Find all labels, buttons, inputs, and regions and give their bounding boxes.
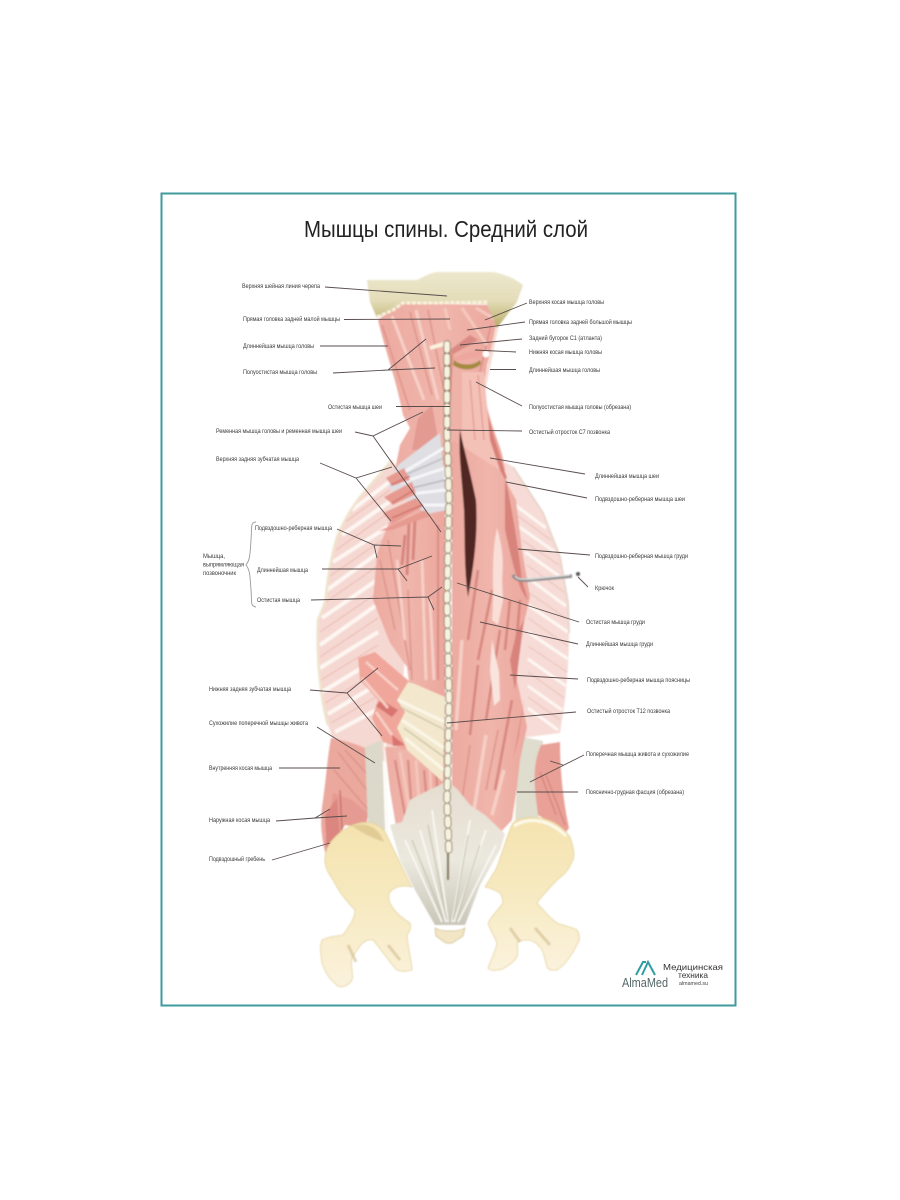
right labels: Длиннейшая мышца груди xyxy=(586,641,653,648)
right labels: Прямая головка задней большой мышцы xyxy=(529,319,632,326)
right labels: Остистая мышца груди xyxy=(586,620,645,626)
left abdominal wall: oblique muscles xyxy=(321,738,387,860)
left labels: Ременная мышца головы и ременная мышца шеи xyxy=(216,429,342,435)
right labels xyxy=(529,300,690,796)
neck muscles xyxy=(378,303,507,482)
left labels: Прямая головка задней малой мышцы xyxy=(243,316,340,323)
ribs left xyxy=(318,460,420,765)
logo: AlmaMed: техника xyxy=(678,970,708,980)
logo: AlmaMed xyxy=(622,962,723,990)
upper gray aponeurosis with serratus slips xyxy=(379,433,447,531)
left labels xyxy=(203,283,382,863)
central lumbosacral fascia xyxy=(390,780,505,925)
right labels: Остистый отросток Т12 позвонка xyxy=(587,708,671,715)
left labels: выпрямляющая xyxy=(203,562,244,568)
right labels: Длиннейшая мышца шеи xyxy=(595,473,659,480)
left erector spinae xyxy=(373,480,445,830)
right labels: Нижняя косая мышца головы xyxy=(529,350,602,356)
right labels: Подвздошно-реберная мышца шеи xyxy=(595,497,685,503)
retractor hook xyxy=(513,572,580,580)
right labels: Верхняя косая мышца головы xyxy=(529,300,604,306)
ribs right xyxy=(500,462,569,740)
left labels: Остистая мышца xyxy=(257,598,301,604)
left labels: Верхняя задняя зубчатая мышца xyxy=(216,457,300,463)
logo: AlmaMed: almamed.su xyxy=(679,981,708,987)
leader lines xyxy=(246,287,590,860)
right labels: Полуостистая мышца головы (обрезана) xyxy=(529,405,631,411)
logo mark xyxy=(636,962,655,975)
left lower serratus posterior xyxy=(358,652,445,782)
iliac bone left xyxy=(320,822,412,987)
right erector spinae xyxy=(452,440,530,835)
spine of spinous processes xyxy=(447,342,449,880)
left labels: Мышца, xyxy=(203,554,225,560)
left labels: Нижняя задняя зубчатая мышца xyxy=(209,687,292,693)
obliquus inferior bar xyxy=(452,348,484,362)
right labels: Остистый отросток С7 позвонка xyxy=(529,429,611,436)
poster frame xyxy=(162,194,736,1006)
left labels: Сухожилие поперечной мышцы живота xyxy=(209,720,309,727)
C1 arch xyxy=(453,360,481,369)
anatomical illustration xyxy=(318,272,580,987)
skull base xyxy=(367,272,523,328)
right labels: Длиннейшая мышца головы xyxy=(529,367,600,374)
iliac bone right xyxy=(485,818,579,970)
left labels: Длиннейшая мышца головы xyxy=(243,343,314,350)
title: Мышцы спины. Средний слой xyxy=(304,216,588,242)
left labels: Подвздошно-реберная мышца xyxy=(255,526,333,532)
left labels: Верхняя шейная линия черепа xyxy=(242,283,321,290)
left labels: Длиннейшая мышца xyxy=(257,567,309,574)
right labels: Задний бугорок С1 (атланта) xyxy=(529,335,602,342)
dark paraspinal cleft xyxy=(459,430,477,597)
right labels: Подвздошно-реберная мышца поясницы xyxy=(587,678,690,684)
bracket xyxy=(246,522,256,607)
left labels: Полуостистая мышца головы xyxy=(243,370,317,376)
logo tagline: Медицинская xyxy=(663,962,723,972)
tendon near C2 xyxy=(430,343,447,348)
left labels: Остистая мышца шеи xyxy=(328,405,382,411)
right labels: Подвздошно-реберная мышца груди xyxy=(595,554,688,560)
right labels: Пояснично-грудная фасция (обрезана) xyxy=(586,790,684,796)
logo wordmark: AlmaMed xyxy=(622,976,668,990)
right labels: Поперечная мышца живота и сухожилие xyxy=(586,752,690,758)
left labels: позвоночник xyxy=(203,571,236,577)
left labels: Наружная косая мышца xyxy=(209,818,271,824)
right abdominal wall: transversus and fascia xyxy=(514,737,569,832)
sacrum tip xyxy=(435,928,465,943)
right labels: Крючок xyxy=(595,586,614,592)
left labels: Внутренняя косая мышца xyxy=(209,766,273,772)
left labels: Подвздошный гребень xyxy=(209,856,265,863)
